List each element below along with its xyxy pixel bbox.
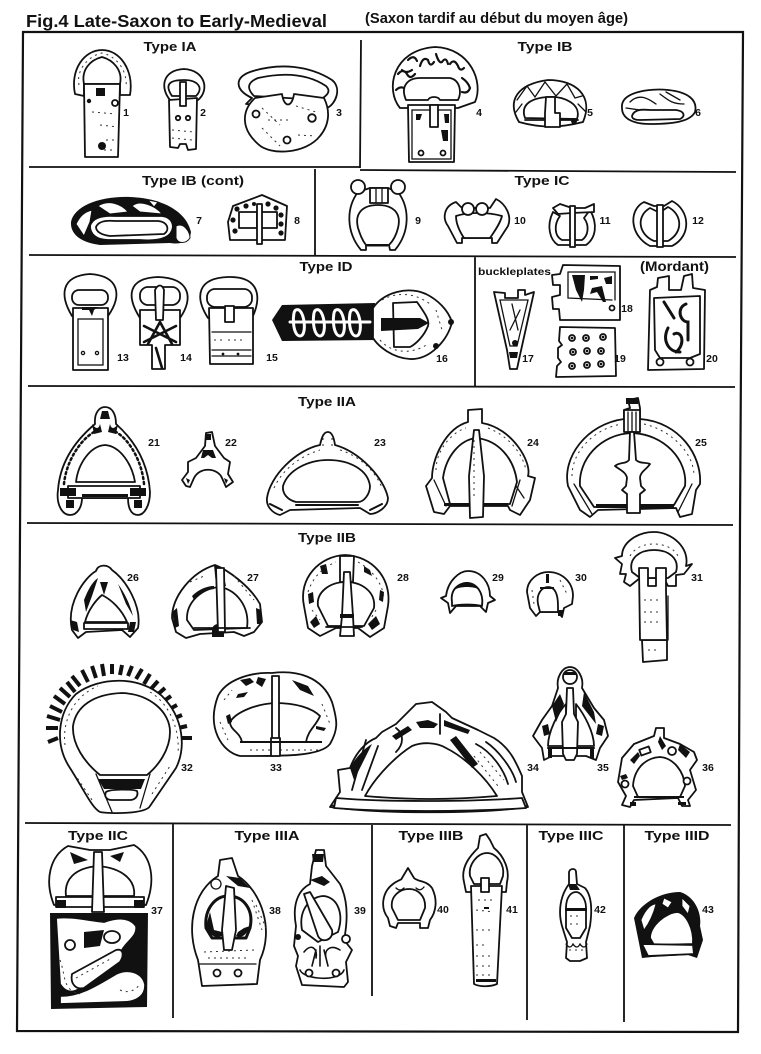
plate 17: 17 bbox=[522, 353, 534, 365]
label: Mordant: (Mordant) bbox=[640, 258, 709, 274]
buckle 22 bbox=[182, 432, 237, 487]
buckle 7 bbox=[71, 197, 202, 245]
buckle 7: 7 bbox=[196, 215, 202, 227]
buckle 43: 43 bbox=[702, 904, 714, 916]
buckle 12: 12 bbox=[692, 215, 704, 227]
panel: Type IIID bbox=[634, 828, 714, 958]
buckle 40: 40 bbox=[437, 904, 449, 916]
buckle 21 bbox=[58, 407, 160, 515]
heading: Type IIA: Type IIA bbox=[298, 394, 357, 409]
buckle 34 bbox=[330, 702, 539, 812]
buckle 28 bbox=[303, 555, 409, 637]
buckle 3 bbox=[239, 66, 342, 152]
buckle 36: 36 bbox=[702, 762, 714, 774]
buckle 33 bbox=[214, 672, 336, 774]
heading: Type IIB: Type IIB bbox=[298, 530, 356, 545]
buckle 13: 13 bbox=[117, 352, 129, 364]
buckle 11: 11 bbox=[599, 215, 611, 227]
buckle 15 bbox=[200, 277, 278, 364]
plate 18 bbox=[552, 265, 633, 320]
plate 19 bbox=[556, 327, 626, 377]
subtitle: (Saxon tardif au début du moyen âge) bbox=[365, 11, 628, 27]
buckle 28: 28 bbox=[397, 572, 409, 584]
buckle 41: 41 bbox=[506, 904, 518, 916]
buckle 4: 4 bbox=[476, 107, 482, 119]
panel: Type IC bbox=[349, 173, 704, 250]
buckle 1 bbox=[74, 50, 131, 157]
buckle 25 bbox=[567, 398, 707, 517]
buckle 10 bbox=[445, 199, 526, 243]
buckle 4 bbox=[393, 47, 482, 162]
panel: Type IIA bbox=[58, 394, 707, 518]
buckle 34: 34 bbox=[527, 762, 539, 774]
buckle 30: 30 bbox=[575, 572, 587, 584]
buckle 36 bbox=[618, 728, 714, 807]
buckle 27 bbox=[172, 565, 262, 638]
buckle 31: 31 bbox=[691, 572, 703, 584]
buckle 38 bbox=[192, 858, 281, 986]
label: buckleplates: buckleplates bbox=[478, 266, 551, 278]
panel: Type IIC bbox=[49, 828, 163, 1009]
panel: Type IB (cont) bbox=[71, 173, 300, 245]
panel: Type IA bbox=[74, 39, 342, 157]
buckle 29 bbox=[441, 571, 504, 613]
plate 18: 18 bbox=[621, 303, 633, 315]
mordant 20: 20 bbox=[706, 353, 718, 365]
buckle 2: 2 bbox=[200, 107, 206, 119]
panel: buckleplates bbox=[478, 258, 718, 377]
buckle 42: 42 bbox=[594, 904, 606, 916]
buckle 22: 22 bbox=[225, 437, 237, 449]
buckle 41 bbox=[463, 834, 518, 986]
heading: Type IIC: Type IIC bbox=[68, 828, 129, 843]
buckle 35 bbox=[533, 667, 609, 774]
heading: Type IC: Type IC bbox=[514, 173, 570, 188]
buckle 27: 27 bbox=[247, 572, 259, 584]
heading: Type IIIA: Type IIIA bbox=[234, 828, 300, 843]
panel: Type ID bbox=[65, 259, 454, 370]
buckle 38: 38 bbox=[269, 905, 281, 917]
buckle 5: 5 bbox=[587, 107, 593, 119]
buckle 24 bbox=[426, 409, 539, 518]
heading: Type IB (cont): Type IB (cont) bbox=[142, 173, 244, 188]
buckle 1: 1 bbox=[123, 107, 129, 119]
buckle 26: 26 bbox=[127, 572, 139, 584]
buckle 32: 32 bbox=[181, 762, 193, 774]
buckle 8: 8 bbox=[294, 215, 300, 227]
buckle 11 bbox=[549, 204, 611, 247]
buckle 16: 16 bbox=[436, 353, 448, 365]
buckle 32 bbox=[46, 664, 193, 813]
panel: Type IIIA bbox=[192, 828, 366, 987]
title: Fig.4 Late-Saxon to Early-Medieval bbox=[26, 11, 327, 31]
buckle 10: 10 bbox=[514, 215, 526, 227]
heading: Type IB: Type IB bbox=[518, 39, 572, 54]
buckle 30 bbox=[527, 572, 587, 617]
buckle 16 bbox=[272, 290, 454, 365]
panel: Type IIIC bbox=[538, 828, 606, 961]
buckle 26 bbox=[70, 566, 139, 638]
panel: Type IIB bbox=[46, 530, 714, 813]
mordant 20 bbox=[648, 274, 718, 370]
buckle 14: 14 bbox=[180, 352, 192, 364]
buckle 21: 21 bbox=[148, 437, 160, 449]
buckle 13 bbox=[65, 274, 129, 370]
buckle 12 bbox=[633, 201, 704, 247]
buckle 9: 9 bbox=[415, 215, 421, 227]
buckle 3: 3 bbox=[336, 107, 342, 119]
buckle 9 bbox=[349, 180, 421, 250]
heading: Type ID: Type ID bbox=[300, 259, 352, 274]
buckle 37: 37 bbox=[151, 905, 163, 917]
buckle 37 bbox=[49, 845, 163, 1009]
buckle 6: 6 bbox=[695, 107, 701, 119]
plate 17 bbox=[494, 290, 534, 369]
buckle 6 bbox=[622, 90, 701, 124]
buckle 5 bbox=[514, 80, 593, 127]
buckle 39: 39 bbox=[354, 905, 366, 917]
buckle 33: 33 bbox=[270, 762, 282, 774]
buckle 15: 15 bbox=[266, 352, 278, 364]
buckle 29: 29 bbox=[492, 572, 504, 584]
heading: Type IIIB: Type IIIB bbox=[398, 828, 464, 843]
heading: Type IA: Type IA bbox=[144, 39, 197, 54]
buckle 24: 24 bbox=[527, 437, 539, 449]
buckle 8 bbox=[228, 195, 300, 244]
panel: Type IIIB bbox=[383, 828, 518, 986]
heading: Type IIIC: Type IIIC bbox=[538, 828, 604, 843]
buckle 35: 35 bbox=[597, 762, 609, 774]
buckle 14 bbox=[132, 277, 192, 369]
plate 19: 19 bbox=[614, 353, 626, 365]
buckle 31 bbox=[615, 532, 703, 662]
buckle 2 bbox=[164, 69, 206, 150]
buckle 39 bbox=[294, 850, 366, 987]
panel: Type IB bbox=[393, 39, 701, 162]
buckle 25: 25 bbox=[695, 437, 707, 449]
heading: Type IIID: Type IIID bbox=[644, 828, 710, 843]
buckle 23 bbox=[267, 432, 388, 515]
buckle 23: 23 bbox=[374, 437, 386, 449]
buckle 40 bbox=[383, 868, 449, 928]
